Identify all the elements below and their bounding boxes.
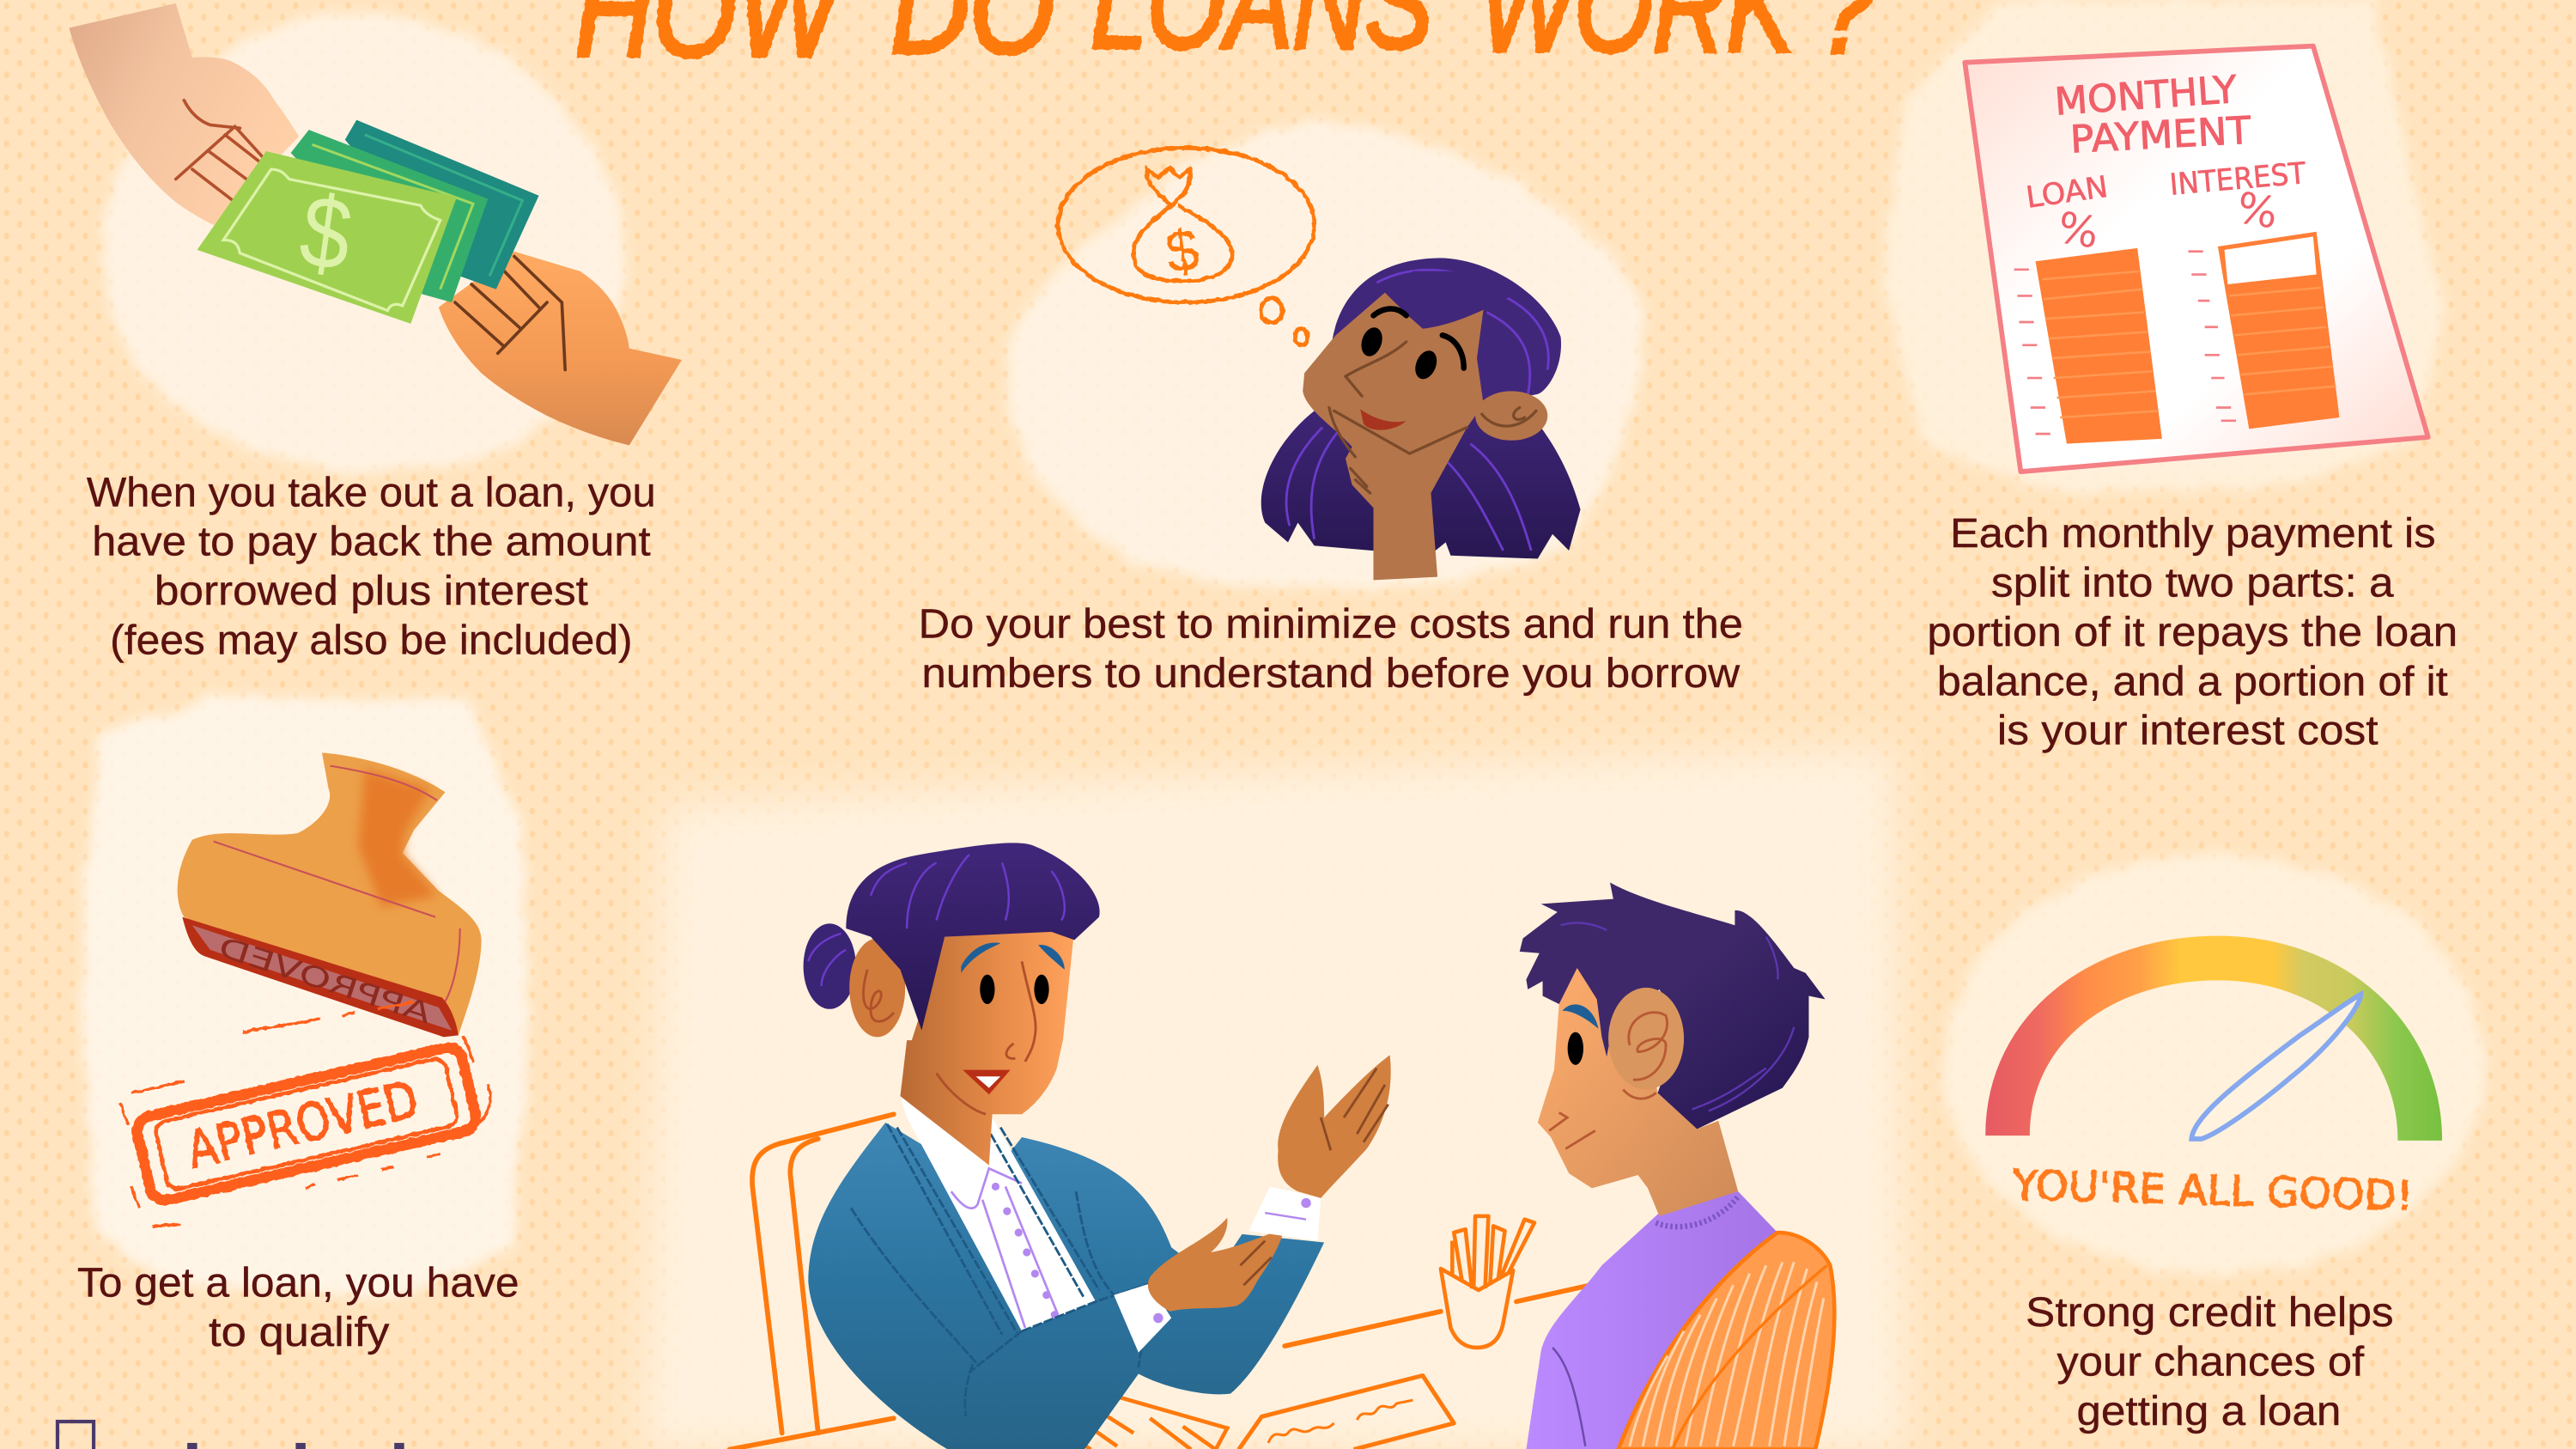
man's neck and face (1538, 968, 1738, 1216)
panel: monthly payment sheet (1965, 46, 2428, 472)
man's orange chair back (1619, 1233, 1834, 1449)
interest percent bar: % (2233, 182, 2281, 239)
icon: stamp rubber face: APPROVED (215, 930, 435, 1030)
panel: hands exchanging money (69, 3, 682, 446)
panel: thinking woman (1058, 148, 1581, 580)
icon: thought bubble with money bag (1058, 148, 1315, 345)
icon: man in profile (1520, 882, 1834, 1449)
caption: minimize costs (919, 601, 1743, 697)
icon: front banknote (197, 151, 457, 324)
icon: stamp rubber face (182, 917, 459, 1037)
woman's lower hand and cuff (1114, 1218, 1285, 1353)
loan percent bar (2014, 170, 2162, 444)
icon: gauge needle (2191, 995, 2360, 1139)
caption: take out a loan: borrowed plus interest (155, 569, 588, 614)
gauge label: YOU'RE ALL GOOD! (2011, 1162, 2414, 1221)
panel: credit gauge (2008, 958, 2420, 1221)
icon: pen cup (1441, 1216, 1534, 1348)
woman's raised hand and cuff (1249, 1055, 1391, 1241)
man's facial features (1549, 1004, 1668, 1148)
man's hair (1520, 882, 1826, 1129)
caption: monthly payment: portion of it repays the loan (1927, 610, 2458, 655)
caption: monthly payment: is your interest cost (1997, 709, 2379, 754)
woman's shirt (900, 1096, 1096, 1331)
woman's hair bun (804, 923, 856, 1009)
icon: left hand (69, 3, 299, 225)
woman's hair (846, 843, 1100, 1031)
caption: minimize costs: Do your best to minimize costs and run the (919, 601, 1743, 647)
caption: qualify: to qualify (209, 1310, 390, 1355)
woman's neck and face (900, 928, 1074, 1166)
interest percent bar (2168, 156, 2339, 429)
icon: paper on desk (1047, 1395, 1227, 1449)
icon: front banknote: $ (294, 174, 358, 293)
icon: woman's hair (1261, 258, 1581, 559)
woman's jacket (808, 1123, 1324, 1449)
icon: chair and desk outlines (729, 1114, 1605, 1449)
icon: sheet of paper (1965, 46, 2428, 472)
caption: monthly payment: balance, and a portion of it (1937, 659, 2448, 704)
caption: strong credit (2026, 1290, 2394, 1434)
jacket lapels and seams (851, 1124, 1150, 1416)
caption: strong credit: Strong credit helps (2026, 1290, 2394, 1336)
sheet title: PAYMENT (2069, 109, 2252, 162)
caption: monthly payment: split into two parts: a (1991, 561, 2394, 606)
sheet title (2053, 68, 2252, 162)
caption: strong credit: getting a loan (2076, 1389, 2341, 1434)
icon: right hand (439, 252, 682, 446)
interest percent bar: INTEREST (2168, 156, 2308, 203)
icon: thought bubble with money bag: $ (1162, 216, 1203, 286)
caption: take out a loan: (fees may also be included) (110, 618, 633, 664)
icon: green banknote (291, 130, 488, 302)
woman's facial features (863, 943, 1065, 1114)
sheet title: MONTHLY (2053, 68, 2239, 125)
logo (cropped at page edge) (58, 1422, 404, 1449)
panel: approval stamp (120, 752, 489, 1226)
icon: gauge arc (2008, 958, 2420, 1141)
caption: qualify: To get a loan, you have (77, 1261, 519, 1306)
icon: teal banknote (345, 120, 539, 289)
woman's ear (849, 939, 905, 1037)
man's sweater (1526, 1191, 1777, 1449)
loan percent bar: % (2054, 202, 2103, 259)
caption: take out a loan: have to pay back the amount (92, 520, 651, 565)
icon: approved imprint: APPROVED (181, 1069, 423, 1180)
caption: strong credit: your chances of (2057, 1339, 2365, 1385)
caption: monthly payment: Each monthly payment is (1950, 511, 2436, 557)
caption: take out a loan: When you take out a loan, you (87, 470, 656, 515)
icon: woman's face and hand (1303, 271, 1547, 580)
caption: qualify (77, 1261, 519, 1355)
icon: note card on desk (1239, 1375, 1454, 1449)
icon: approved imprint (120, 1002, 489, 1226)
panel: central scene (729, 843, 1834, 1449)
title (575, 0, 1876, 84)
icon: woman in blue jacket (804, 843, 1391, 1449)
caption: minimize costs: numbers to understand before you borrow (921, 651, 1741, 697)
loan percent bar: LOAN (2024, 170, 2110, 216)
caption: take out a loan (87, 470, 656, 664)
caption: monthly payment (1927, 511, 2458, 754)
man's ear (1608, 988, 1684, 1090)
icon: rubber stamp handle (178, 752, 482, 1035)
